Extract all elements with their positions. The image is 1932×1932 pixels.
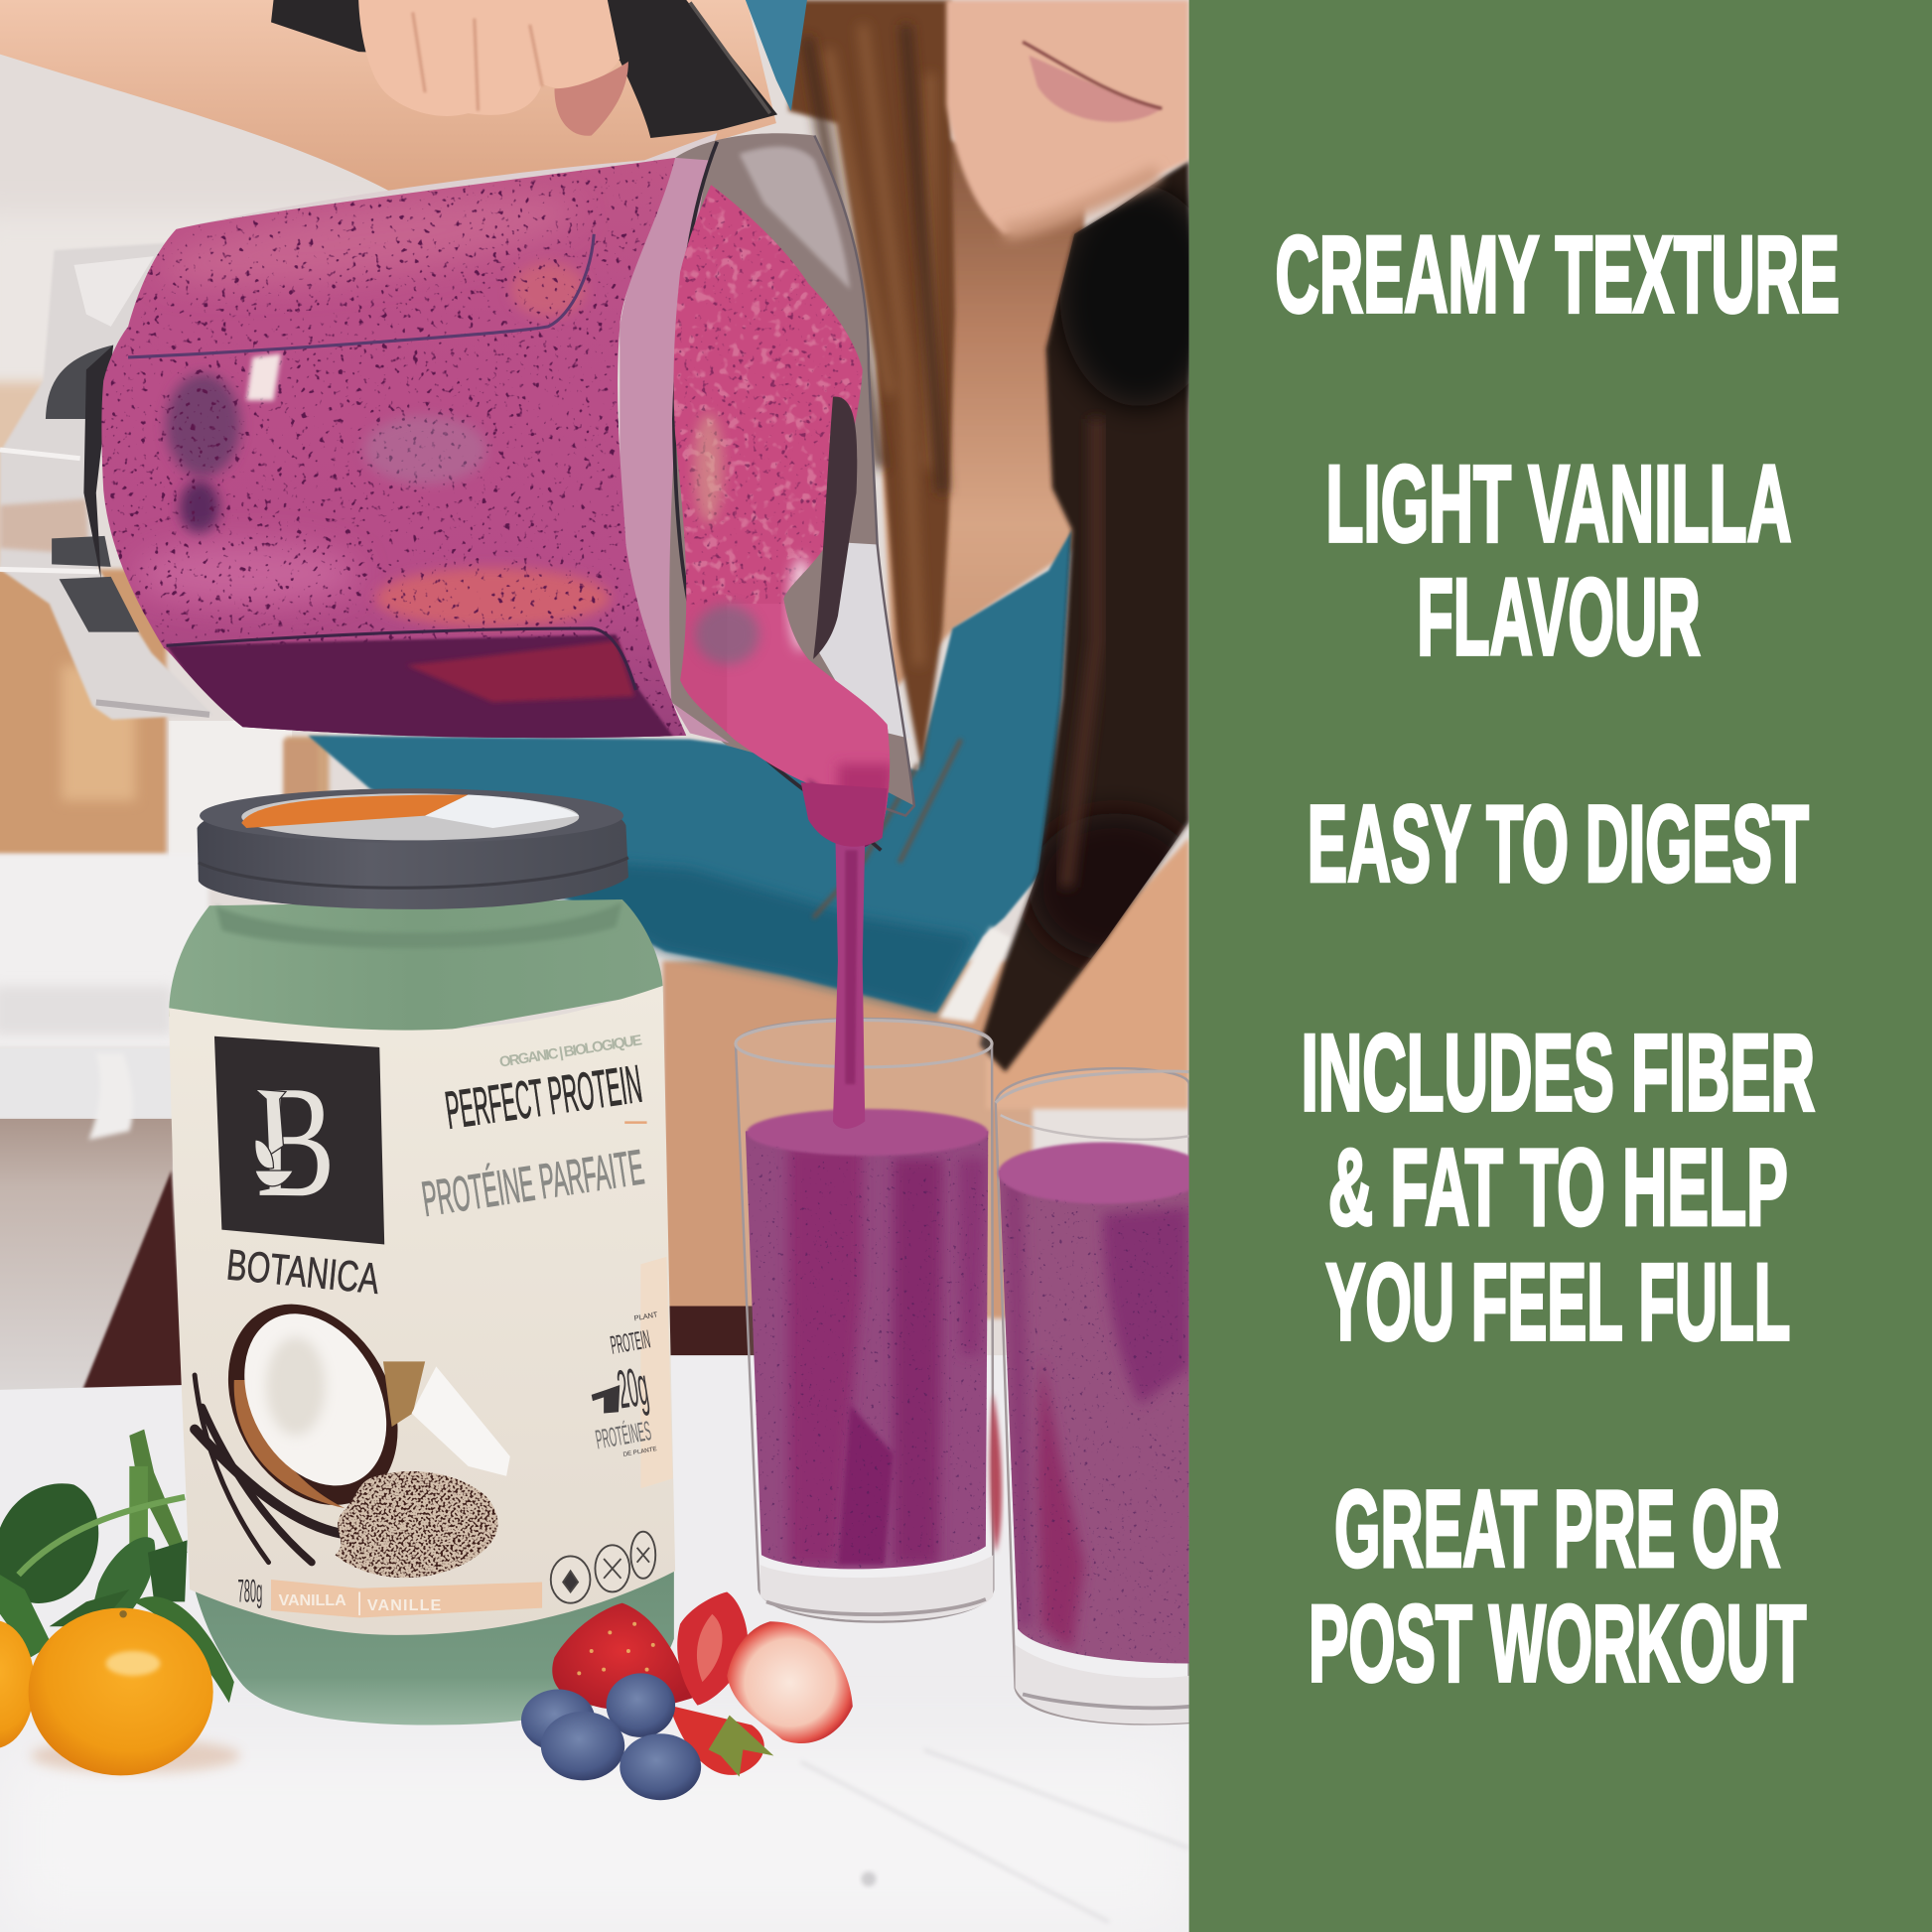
woman: teal top bbox=[308, 530, 1072, 1013]
Botanica jar: PROTÉINE PARFAITE bbox=[419, 1139, 647, 1227]
woman: hand gripping handle bbox=[358, 0, 628, 136]
jar: lid sticker bbox=[241, 793, 579, 840]
Botanica jar: 780g bbox=[238, 1573, 262, 1608]
jar: brand name: BOTANICA bbox=[224, 1241, 381, 1304]
jar: protein claim: DE PLANTE bbox=[622, 1446, 657, 1458]
spinach leaves bbox=[0, 1430, 240, 1773]
jar: protein claim bbox=[592, 1310, 659, 1458]
cut strawberry upright bbox=[677, 1591, 748, 1706]
blender: clear upper rim bbox=[176, 133, 717, 271]
blender: clear side band and far rim bbox=[620, 133, 914, 806]
jar: logo letter B: B bbox=[256, 1052, 336, 1230]
blender: interior far wall and pouring spout bbox=[673, 185, 890, 848]
glass one: smoothie surface bbox=[747, 1109, 988, 1156]
jar: peach side strip bbox=[640, 1257, 673, 1488]
jar: organic label: ORGANIC | BIOLOGIQUE bbox=[498, 1033, 643, 1071]
glass one: clear tumbler bbox=[736, 1019, 993, 1622]
jar: vanilla pods bbox=[195, 1375, 351, 1563]
Botanica jar: PROTÉINES bbox=[594, 1415, 653, 1454]
hair: dark right mass bbox=[977, 159, 1189, 1074]
Botanica jar: 20g bbox=[614, 1355, 652, 1420]
text: PERFECT PROTEIN bbox=[442, 1055, 645, 1141]
blender: black handle bbox=[271, 0, 777, 138]
whole strawberry bbox=[552, 1603, 692, 1710]
jar: certification badges bbox=[551, 1532, 655, 1603]
woman: lips bbox=[1023, 42, 1162, 122]
Botanica jar bbox=[169, 788, 675, 1725]
blender: dark lower smoothie band bbox=[167, 634, 675, 740]
jar: scoop icon bbox=[592, 1385, 620, 1414]
jar: protein claim: PLANT bbox=[633, 1310, 659, 1322]
Botanica jar: PROTEIN bbox=[609, 1323, 652, 1360]
woman: torso and waistband bbox=[82, 740, 1189, 1390]
benefit: light vanilla flavour bbox=[1325, 444, 1792, 678]
jar: flavour strip: VANILLA bbox=[278, 1591, 346, 1609]
woman: neck and chest skin bbox=[878, 136, 1084, 690]
blender: dark base parts bbox=[46, 345, 139, 632]
jar: lid bbox=[198, 788, 628, 909]
green benefits panel bbox=[1189, 0, 1932, 1932]
benefit: light vanilla flavour: FLAVOUR bbox=[1417, 557, 1701, 678]
glass two with smoothie bbox=[990, 1068, 1207, 1724]
white marble table bbox=[0, 1355, 1189, 1932]
woman: teal shoulder strap bbox=[746, 0, 807, 111]
jar: flavour strip: VANILLE bbox=[367, 1596, 442, 1614]
blender: clear plastic base bbox=[0, 242, 213, 720]
woman: hair bbox=[788, 0, 1220, 1072]
halved strawberry bbox=[727, 1621, 853, 1743]
jar: brand square bbox=[214, 1036, 384, 1244]
jar: bottom green base bbox=[195, 1565, 674, 1725]
glass two: smoothie surface bbox=[998, 1142, 1207, 1204]
glass one with smoothie bbox=[736, 782, 998, 1622]
photo background: kitchen wall bbox=[0, 0, 1189, 1932]
woman: white strap bbox=[939, 926, 1013, 1023]
benefit: workout bbox=[1309, 1468, 1806, 1705]
glass two: smoothie body and streaks bbox=[992, 1165, 1195, 1670]
jar: cream label bbox=[169, 986, 675, 1635]
jar: green shoulder bbox=[169, 899, 663, 1035]
oranges bbox=[0, 1608, 213, 1775]
woman: chin and jaw bbox=[946, 0, 1189, 234]
woman: forearm bbox=[0, 0, 776, 191]
strawberries bbox=[552, 1591, 853, 1777]
blender jar bbox=[0, 0, 914, 863]
blender: smoothie body bbox=[101, 158, 687, 739]
jar: coconut bbox=[195, 1275, 510, 1535]
jar: flavour strip bbox=[271, 1580, 542, 1618]
benefit: fiber and fat bbox=[1302, 1013, 1815, 1363]
strawberry with green top bbox=[669, 1706, 773, 1777]
glass two: clear tumbler bbox=[996, 1068, 1189, 1724]
glass one: poured stream bbox=[833, 838, 865, 1129]
jar: quinoa pile bbox=[336, 1471, 498, 1579]
hair: brown left band bbox=[788, 0, 961, 918]
blueberries bbox=[521, 1673, 701, 1800]
glass one: smoothie body and streaks bbox=[740, 1128, 998, 1584]
